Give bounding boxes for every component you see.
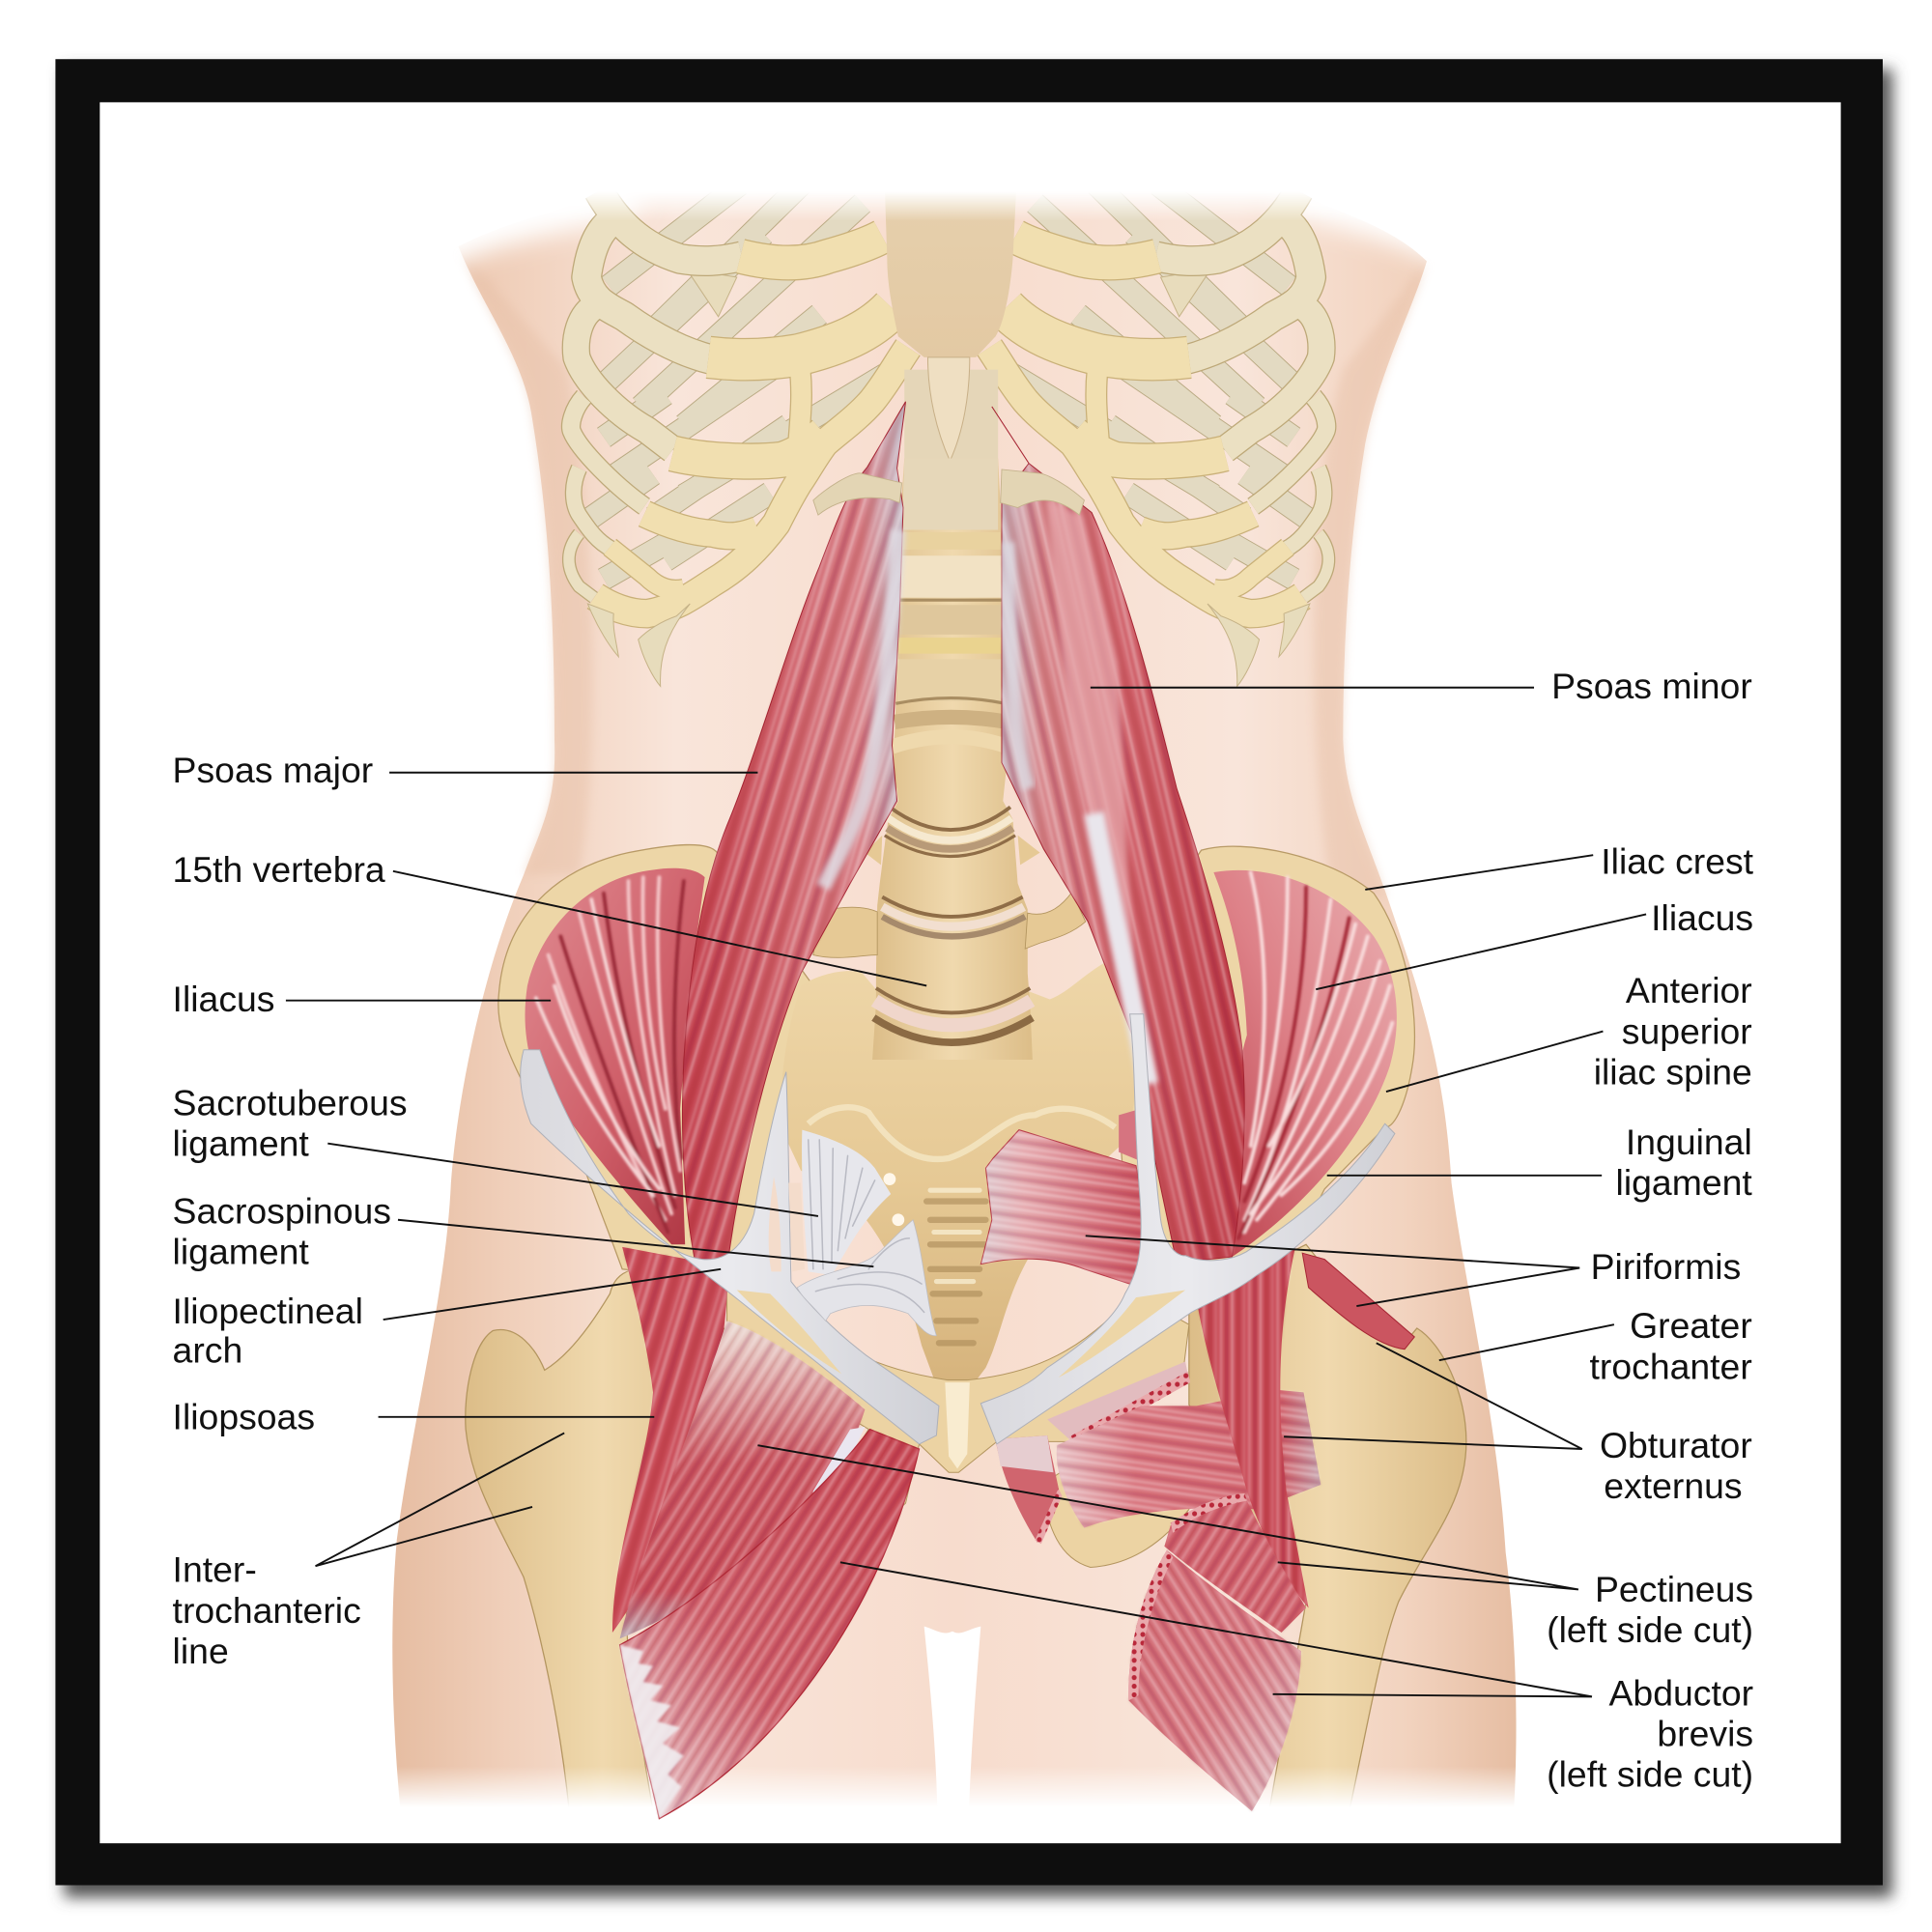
pelvis right wing	[1109, 846, 1414, 1282]
rib spike	[686, 269, 737, 317]
costal cartilages	[595, 237, 908, 613]
labels and leader lines: trochanter	[1590, 1346, 1752, 1386]
rib arm over left psoas	[813, 473, 902, 515]
labels and leader lines: arch	[173, 1330, 242, 1371]
rib tips	[587, 604, 690, 686]
labels and leader lines: Iliopsoas	[173, 1397, 315, 1437]
psoas major right muscle	[992, 407, 1244, 1263]
iliacus right muscle	[1213, 870, 1397, 1257]
labels and leader lines: superior	[1622, 1010, 1752, 1051]
labels and leader lines: Iliac crest	[1601, 840, 1754, 881]
labels and leader lines: ligament	[173, 1232, 309, 1272]
labels and leader lines: brevis	[1657, 1713, 1753, 1753]
costal cartilages outline	[595, 237, 908, 613]
torso and thighs skin silhouette	[392, 185, 1517, 1824]
labels and leader lines: trochanteric	[173, 1590, 361, 1631]
labels and leader lines: ligament	[173, 1122, 309, 1163]
tendon sliver beside adductor	[807, 1427, 865, 1521]
labels and leader lines	[173, 666, 1754, 1794]
labels and leader lines: Iliacus	[173, 979, 274, 1019]
pelvis left wing	[498, 844, 813, 1282]
skin slits in ligament	[769, 1177, 805, 1271]
serrated white tendon	[620, 1645, 684, 1819]
sacrum and coccyx	[781, 961, 1137, 1399]
soft top fade of shoulders	[458, 197, 1427, 274]
labels and leader lines: Sacrospinous	[173, 1191, 391, 1232]
transverse processes	[1025, 892, 1086, 949]
labels and leader lines: (left side cut)	[1547, 1753, 1753, 1794]
lumbar spine column	[813, 458, 1086, 1060]
rib cage: left half	[569, 185, 908, 686]
upper spine behind xiphoid	[904, 370, 998, 458]
sacrotuberous ligament	[802, 1130, 891, 1275]
right femur	[1189, 1244, 1466, 1811]
bone lens under left ligament	[737, 1290, 841, 1374]
piriformis right (medial)	[980, 1109, 1152, 1290]
waist shading	[458, 246, 1427, 899]
labels and leader lines: Iliopectineal	[173, 1291, 363, 1331]
back ribs	[591, 185, 894, 579]
ischium right	[1041, 1441, 1189, 1567]
sacrum transverse ridges	[926, 1202, 985, 1343]
skin and skeleton illustration	[392, 160, 1517, 1824]
sacral foramina	[884, 1173, 1012, 1226]
adductor brevis left	[620, 1430, 920, 1819]
sternum	[885, 185, 1016, 357]
labels and leader lines: externus	[1604, 1465, 1743, 1506]
vertebra block under xiphoid	[902, 458, 998, 529]
obturator externus main	[1057, 1390, 1321, 1528]
labels and leader lines: iliac spine	[1594, 1051, 1752, 1092]
xiphoid process	[927, 357, 970, 461]
labels and leader lines: Inter-	[173, 1549, 257, 1590]
pectineus right cut	[996, 1435, 1062, 1544]
psoas major left muscle	[682, 402, 906, 1269]
labels and leader lines: Pectineus	[1595, 1569, 1753, 1609]
labels and leader lines: Sacrotuberous	[173, 1082, 408, 1122]
sacral ridges	[809, 1107, 1115, 1159]
iliopsoas right lower	[1194, 1233, 1309, 1608]
adductor brevis right	[1128, 1550, 1301, 1811]
labels and leader lines: Anterior	[1626, 970, 1752, 1010]
left femur	[466, 1266, 739, 1811]
labels and leader lines: 15th vertebra	[173, 849, 385, 890]
disc bands	[873, 541, 1033, 1042]
pubic rami	[727, 1282, 1189, 1552]
pubic symphysis	[945, 1382, 970, 1468]
rib cage: right half (mirror)	[989, 185, 1328, 686]
labels and leader lines: Abductor	[1609, 1672, 1753, 1713]
iliacus left muscle	[525, 868, 705, 1244]
labels and leader lines: Greater	[1630, 1305, 1752, 1346]
pectineus right lower	[1164, 1493, 1306, 1633]
bone lens under right ligament	[1059, 1290, 1185, 1378]
ligament: inguinal left and iliopectineal arch	[521, 1050, 939, 1444]
psoas medial tendon sheen	[823, 529, 898, 887]
ligament: inguinal right	[980, 1014, 1395, 1444]
left labels: Psoas major	[173, 750, 373, 790]
sacrospinous ligament	[797, 1220, 936, 1336]
obturator externus cut upper	[1047, 1361, 1190, 1448]
rib arm over right psoas	[1001, 469, 1084, 515]
labels and leader lines: Obturator	[1600, 1425, 1752, 1465]
labels and leader lines: Piriformis	[1591, 1246, 1741, 1287]
pectineus left	[620, 1321, 865, 1638]
labels and leader lines: line	[173, 1631, 229, 1671]
labels and leader lines: Iliacus	[1651, 897, 1753, 938]
psoas minor tendon	[1046, 499, 1140, 1038]
right labels: Psoas minor	[1551, 666, 1752, 706]
bony ribs	[569, 191, 742, 598]
labels and leader lines: Inguinal	[1626, 1122, 1752, 1162]
piriformis right (lateral, to trochanter)	[1302, 1253, 1414, 1350]
iliopsoas left lower	[612, 1247, 727, 1633]
labels and leader lines: ligament	[1616, 1162, 1752, 1203]
labels and leader lines: (left side cut)	[1547, 1609, 1753, 1650]
leader lines	[286, 688, 1646, 1696]
